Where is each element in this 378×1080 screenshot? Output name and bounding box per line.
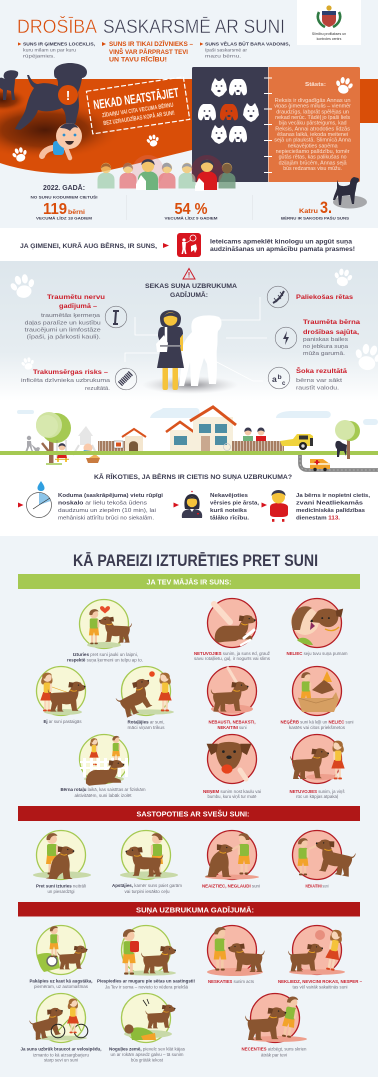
text block: safety: Traumēta bērna xyxy=(303,319,361,326)
step 2: doctor: kurš noteiks xyxy=(210,508,247,514)
banner: at home: JA TEV MĀJĀS IR SUNS: xyxy=(146,578,232,586)
text block: family member: SUNS IR ĢIMENES LOCEKLIS, xyxy=(23,42,95,47)
logo block: kontroles centrs xyxy=(317,37,342,41)
panel: story: Stāsts: xyxy=(305,82,326,88)
illustration: do not poke xyxy=(208,666,256,716)
panel: story: ēšanas laikā, iekoda meitenei xyxy=(277,132,348,138)
panel: header background xyxy=(0,0,378,228)
step 2: doctor: Nekavējoties xyxy=(210,493,248,499)
text block: safety: drošības sajūta, xyxy=(303,329,359,336)
panel: story: nekavējoties saņēma xyxy=(288,143,338,149)
illustration: do not shout xyxy=(288,926,345,975)
caption: NECENTIES aizbēgt, suns skrien xyxy=(242,1047,307,1052)
step 2: doctor: tālāko rīcību. xyxy=(210,516,250,522)
text block: rabies: inficēta dzīvnieka uzbrukuma xyxy=(21,378,110,384)
panel: behaviour background xyxy=(0,536,378,1077)
panel: story: viņas ģimenes mīlulis – vienmēr xyxy=(274,103,351,110)
icon: dog head breeds xyxy=(198,78,259,144)
right tree and dog xyxy=(335,420,360,459)
caption: NEKAITINI suni xyxy=(306,884,329,889)
illustration: do not take ball xyxy=(207,734,256,784)
icon: injured child xyxy=(270,490,288,522)
illustration: do not touch xyxy=(205,830,259,880)
heading: consequences xyxy=(145,268,237,299)
icon: white dog silhouette xyxy=(142,315,238,394)
text block: rabies: rezultātā. xyxy=(85,386,110,392)
illustration: do not stare xyxy=(207,926,264,976)
step 3: call 113: Ja bērns ir nopietni cietis, xyxy=(296,493,371,499)
stat: 54 percent: VECUMĀ LĪDZ 9 GADIEM xyxy=(164,216,218,221)
road xyxy=(300,455,378,470)
landscape illustration xyxy=(0,407,378,471)
step 3: call 113: zvani Neatliekamās xyxy=(296,500,363,506)
text block: only an animal: VIŅŠ VAR PĀRPRAST TEVI xyxy=(109,48,188,56)
left tree xyxy=(36,412,71,465)
caption: vai turpini iesākto ceļu xyxy=(124,889,170,894)
text block: family member: rūpējamies. xyxy=(23,54,55,59)
panel: story: bija vecāku pārsteigums, kad xyxy=(279,121,347,127)
icon: bone xyxy=(105,306,127,328)
icon: stopwatch and drop xyxy=(26,481,52,518)
icon: doctor xyxy=(182,491,202,518)
text block: rabies xyxy=(21,369,110,392)
caption: NEĢĒRB suni kā leļļi un NELIEC suni xyxy=(280,720,354,725)
heading: consequences: GADĪJUMĀ: xyxy=(170,291,208,299)
caption: NEKLIEDZ, NEVICINI ROKAS, NESPER – xyxy=(278,979,363,984)
banner: attack: SUŅA UZBRUKUMA GADĪJUMĀ: xyxy=(136,905,254,914)
callout: never leave alone stamp: ZĪDAIŅU VAI CITA VECUMA BĒRNU xyxy=(102,102,174,119)
illustration: face to face xyxy=(291,598,343,648)
illustration: do not tease xyxy=(292,830,357,880)
swing girl xyxy=(55,440,69,462)
title: SASKARSMĒ AR SUNI xyxy=(103,17,285,38)
title: DROŠĪBA xyxy=(17,16,97,38)
panel: consequences background xyxy=(0,261,378,401)
illustration: isolate dog xyxy=(80,734,128,786)
caption: un piesardzīgi xyxy=(48,889,75,894)
text block: nerve trauma: traucējumi un limfostāze xyxy=(25,328,101,334)
panel: white advice band xyxy=(0,228,378,260)
caption: NEKAITINI suni xyxy=(218,725,247,730)
illustration: bicycle xyxy=(28,994,88,1042)
text block: pack leader: īpaši saskarsmē ar xyxy=(205,48,248,53)
caption: savu rotaļlietu, guļ, ir nogurīs vai slims xyxy=(194,656,270,661)
text block: nerve trauma: gadījumā – xyxy=(59,303,97,310)
text block: safety: mūža garumā. xyxy=(303,351,345,357)
heading: consequences: SEKAS SUŅA UZBRUKUMA xyxy=(145,283,237,290)
text block: nerve trauma xyxy=(25,294,105,341)
stat: 119 children: NO SUNU KODUMIEM CIETUŠI xyxy=(30,194,98,200)
panel: story: dziļajām brūcēm, Annas sejā xyxy=(279,160,347,166)
seam ticks xyxy=(264,67,272,182)
icon: abc xyxy=(268,367,290,389)
icon: decorative paws xyxy=(8,267,378,373)
fence right with kids xyxy=(232,428,284,452)
heading: how to behave: KĀ PAREIZI IZTURĒTIES PRET SUNI xyxy=(73,551,318,570)
stat: 119 children: VECUMĀ LĪDZ 18 GADIEM xyxy=(36,216,92,221)
caption: izmanto to kā aizsargbarjeru xyxy=(33,1053,89,1058)
text block: only an animal: UN TAVU RĪCĪBU! xyxy=(109,56,167,64)
text block: rabies: Trakumsērgas risks – xyxy=(33,369,109,376)
caption: Ja suns uzbrūk braucot ar velosipēdu, xyxy=(20,1047,102,1052)
icon: abc: b xyxy=(278,374,282,381)
ground xyxy=(0,451,378,455)
logo block: Slimību profilakses un xyxy=(312,32,346,36)
icon: dog silhouette right xyxy=(333,177,367,208)
text block: only an animal: SUNS IR TIKAI DZĪVNIEKS – xyxy=(109,41,194,48)
text block: family member xyxy=(18,42,95,59)
step 1: wash: noskalo ar lielu tekoša ūdens xyxy=(58,500,147,506)
text block: nerve trauma: daļas paralīze un kustību xyxy=(25,320,101,326)
text block: pack leader xyxy=(200,41,290,59)
caption: starp sevi un suni xyxy=(44,1058,78,1063)
icon: scar xyxy=(267,286,289,308)
icon: injured girl xyxy=(156,310,184,390)
stat: 119 children: bērni xyxy=(68,209,85,216)
icon: small dog silhouette xyxy=(0,70,18,100)
caption: piemēram, uz automašīnas xyxy=(34,984,88,989)
step 2: doctor: vērsies pie ārsta, xyxy=(210,500,260,506)
illustration: dressing xyxy=(292,666,342,716)
step 1: wash: daudzumu un ziepēm (10 min), lai xyxy=(58,508,156,514)
panel: white advice band: audzināšanas un apmācību pamata prasmes! xyxy=(210,247,355,253)
fence left xyxy=(98,441,125,452)
callout: never leave alone stamp: BEZ UZRAUDZĪBAS KOPĀ AR SUNI! xyxy=(103,110,175,127)
panel: dark dog breeds xyxy=(192,67,269,182)
step 1: wash: Koduma (saskrāpējuma) vietu rūpīgi xyxy=(58,493,164,499)
stat: 54 percent: 54 % xyxy=(174,201,208,218)
caption: bumbu, kuru viņš tur mutē xyxy=(208,794,257,799)
illustration: climb xyxy=(36,926,88,974)
illustration: stop xyxy=(120,830,178,880)
title xyxy=(17,16,285,38)
caption: ātrāk par tevi xyxy=(261,1053,287,1058)
text block: pack leader: SUNS VĒLAS BŪT BARA VADONIS, xyxy=(205,41,290,47)
panel: story: nekad nerūc. Tādēļ jo īpaši liels xyxy=(275,115,351,121)
text block: nerve trauma: traumētās ķermeņa xyxy=(41,313,100,319)
panel: white advice band: Ieteicams apmeklēt kinologu un apgūt suņa xyxy=(210,240,353,246)
text block: speech: Šoka rezultātā xyxy=(296,366,348,375)
caption: NEŅEM sunim nost kaulu vai xyxy=(203,789,261,794)
orange hero band xyxy=(0,79,378,174)
caption: NELIEC seju tuvu suņa purnam xyxy=(286,651,348,656)
caption: kastēs vai citos priekšmetos xyxy=(289,725,345,730)
banner: attack xyxy=(18,902,360,916)
stat: every third: 3. xyxy=(320,198,332,217)
panel: story: Reksis, Annai atrodoties līdzās xyxy=(275,126,350,132)
caption: NETUVOJIES sunim, ja suns ēd, grauž xyxy=(194,651,270,656)
illustration: neutral xyxy=(33,830,91,880)
callout: never leave alone stamp xyxy=(86,77,190,134)
illustration: lie down xyxy=(122,994,176,1042)
icon: abc: c xyxy=(282,381,286,387)
icon: lightning xyxy=(275,327,297,349)
illustration: back to fence xyxy=(122,926,176,976)
stat: 119 children: 2022. GADĀ: xyxy=(43,184,85,192)
caption: NEBAUSTI, NEBAKSTI, xyxy=(208,720,256,725)
text block: pack leader: mazu bērnu. xyxy=(205,54,241,59)
stat: every third: Katru xyxy=(299,208,318,215)
stat: every third: BĒRNU IR SAKODIS PAŠU SUNS xyxy=(281,216,349,221)
caption: Ja Tev ir soma – novieto to vēdera priekšā xyxy=(105,985,189,990)
callout: never leave alone stamp: NEKAD NEATSTĀJIET xyxy=(92,85,180,112)
jeep xyxy=(280,434,313,450)
text block: only an animal xyxy=(102,41,194,64)
caption: rūc un kāpjas atpakaļ xyxy=(296,794,338,799)
illustration: respect xyxy=(80,600,132,648)
text block: safety: no jebkura suņa xyxy=(303,344,348,350)
text block: scars: Paliekošas rētas xyxy=(296,294,353,301)
stat: every third xyxy=(281,198,349,221)
icon: paw left xyxy=(10,146,29,163)
step 3: call 113: medicīniskās palīdzības xyxy=(296,508,365,514)
caption: Noguļies zemē, pievelc sev klāt kājas xyxy=(109,1047,185,1052)
panel: story: būs redzamas visu mūžu. xyxy=(283,166,342,172)
text block: safety xyxy=(303,319,361,357)
stat: 119 children xyxy=(30,184,98,221)
icon: large dog with warning xyxy=(15,63,87,130)
text block: family member: kuru mīlam un par kuru xyxy=(23,48,77,53)
caption: būs grūtāk iekost xyxy=(131,1058,164,1063)
panel: story xyxy=(264,67,360,182)
icon: trainer xyxy=(177,233,201,257)
connector lines xyxy=(125,297,267,381)
caption: NEAIZTIEC, NEGLAUDI suni xyxy=(202,884,260,889)
caption: Bērna rotaļu laikā, kas saistītas ar fiziskām xyxy=(60,787,146,792)
step 3: call 113 xyxy=(262,490,371,522)
caption: Rotaļājies ar suni, xyxy=(128,720,164,724)
step 1: wash xyxy=(18,481,164,522)
panel: story: gūtās rētas, kas palikušas no xyxy=(279,155,347,161)
illustration: walk xyxy=(36,666,86,716)
icon: crawling baby xyxy=(42,123,82,158)
panel: story: Reksis ir divgadīgās Annas un xyxy=(275,98,351,104)
icon: virus xyxy=(115,368,137,390)
caption: NETUVOJIES sunim, ja viņš xyxy=(290,789,344,794)
illustration: do not approach eating xyxy=(208,598,256,648)
caption: Pret suni izturies neitrāli xyxy=(36,884,86,889)
text block: speech: bērns var sākt xyxy=(296,378,343,384)
doghouse xyxy=(114,429,146,451)
text block: nerve trauma: Traumētu nervu xyxy=(47,294,105,301)
walker with dog xyxy=(26,436,40,451)
houses xyxy=(166,407,236,451)
ambulance xyxy=(310,459,330,471)
text block: speech xyxy=(296,366,348,392)
caption: Pakāpies uz kaut kā augstāka, xyxy=(30,979,92,984)
illustration: play xyxy=(113,666,174,719)
stat: 54 percent xyxy=(164,201,218,221)
caption: NESKATIES sunim acīs xyxy=(208,979,254,984)
text block: speech: raustīt valodu. xyxy=(296,386,339,392)
panel: story: nepieciešamo palīdzību, tomēr xyxy=(276,149,350,155)
panel: story: sejā un plaukstā. Slimnīcā Anna xyxy=(274,138,351,144)
banner: stranger dog: SASTOPOTIES AR SVEŠU SUNI: xyxy=(136,810,250,818)
illustration: growling dog xyxy=(290,734,345,784)
panel: white landscape background xyxy=(0,401,378,536)
caption: Piespiedies ar mugaru pie sētas un sastingsti! xyxy=(97,979,195,984)
caption: Apstājies, kamēr suns paiet garām xyxy=(112,883,183,888)
icon: abc: a xyxy=(272,374,277,384)
icon: large dog with warning: ! xyxy=(66,88,70,103)
logo block xyxy=(297,0,361,45)
text block: nerve trauma: (īpaši, ja pārkosti kauli). xyxy=(27,335,101,341)
banner: stranger dog xyxy=(18,806,360,821)
step 1: wash: mehāniski attīrītu brūci no siekalām. xyxy=(58,516,154,522)
heading: what to do: KĀ RĪKOTIES, JA BĒRNS IR CIETIS NO SUŅA UZBRUKUMA? xyxy=(94,473,292,481)
stat: 119 children: 119 xyxy=(43,201,67,218)
caption: respektē suņa ķermeni un telpu ap to. xyxy=(67,658,143,662)
caption: tas vēl vairāk sakaitinās suni xyxy=(292,985,348,990)
caption: aktivitātēm, suni labāk izolēt xyxy=(74,793,132,798)
panel: story: draudzīgs, labprāt spēlējas un xyxy=(276,109,349,115)
caption: Izturies pret suni jauki un laipni, xyxy=(73,652,138,657)
illustration: do not run xyxy=(245,994,307,1042)
playground and baby xyxy=(73,426,100,463)
caption: Ej ar suni pastaigās xyxy=(44,719,82,724)
panel: white advice band: JA ĢIMENEI, KURĀ AUG BĒRNS, IR SUNS, xyxy=(20,242,157,250)
clouds xyxy=(17,408,378,425)
text block: safety: paniskas bailes xyxy=(303,337,348,343)
banner: at home xyxy=(18,574,360,589)
step 2: doctor xyxy=(174,491,260,522)
icon: paw right xyxy=(145,133,161,148)
caption: un ar rokām apsedz galvu – tā sunim xyxy=(110,1052,184,1057)
icon: children row xyxy=(98,155,236,191)
caption: māci viņam trikus xyxy=(128,725,164,730)
step 3: call 113: dienestam 113. xyxy=(296,516,341,522)
